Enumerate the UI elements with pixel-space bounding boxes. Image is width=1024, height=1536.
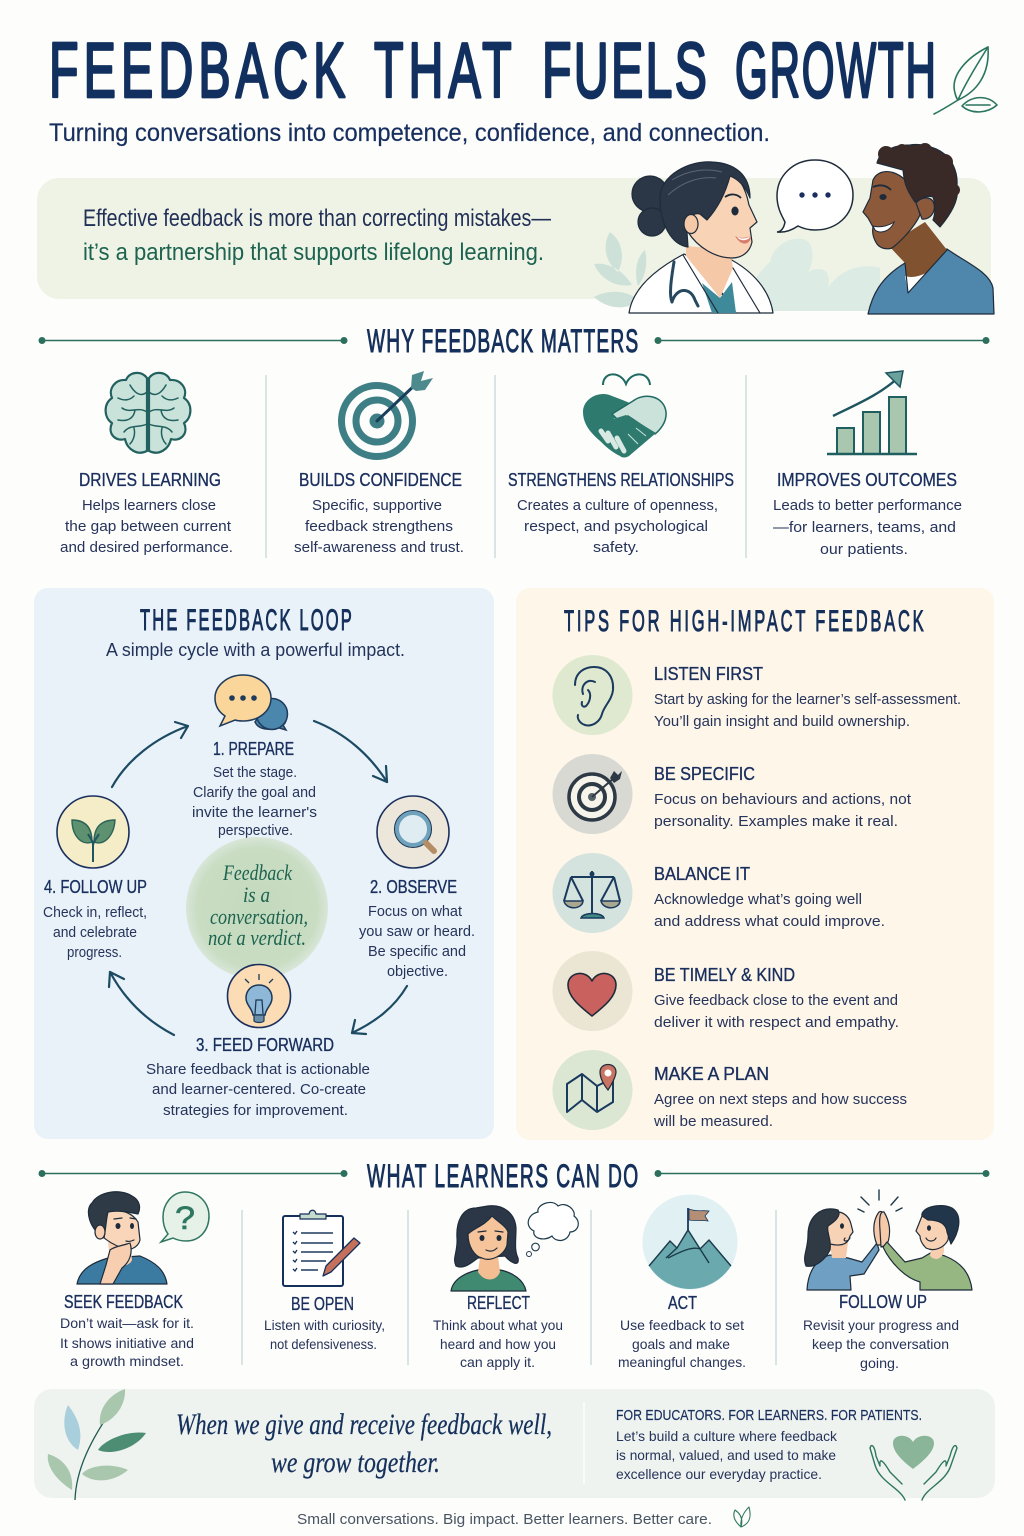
text: perspective. [218,822,293,839]
tip: be timely and kind [552,951,899,1031]
text [654,992,899,1031]
subheading: A simple cycle with a powerful impact. [106,639,405,660]
heading: IMPROVES OUTCOMES [777,470,957,490]
text: It shows initiative and [60,1335,194,1351]
text: intro statement [83,205,551,266]
tip: balance it [552,853,885,933]
text [264,1317,385,1352]
arrow: observe to feed forward [352,986,407,1034]
heading: 3. FEED FORWARD [196,1035,334,1055]
text: intro statement: it’s a partnership that supports lifelong learning. [83,239,544,266]
icon: balance scale [552,853,632,933]
text: a growth mindset. [70,1353,184,1369]
icon: chat bubbles [215,675,288,730]
action: seek feedback [60,1192,209,1369]
text: Clarify the goal and [193,784,316,801]
text [192,764,317,839]
closing quote: we grow together. [271,1446,440,1479]
text [653,1091,907,1130]
icon: magnifying glass [377,796,449,868]
text: the gap between current [65,518,232,535]
text: heard and how you [440,1336,556,1352]
icon: question bubble: ? [175,1200,195,1236]
text: Focus on what [368,903,463,920]
text: Give feedback close to the event and [654,992,898,1009]
call to action [616,1407,922,1482]
text: will be measured. [653,1113,773,1130]
title: FUELS [542,26,707,114]
text: can apply it. [460,1354,535,1370]
arrow: feed forward to follow up [109,972,174,1035]
call to action: is normal, valued, and used to make [616,1447,836,1463]
text [803,1317,959,1371]
action: reflect [433,1202,578,1370]
text [60,497,233,556]
icon: mountain with flag [642,1194,738,1290]
section heading: what learners can do [38,1158,990,1194]
text: Think about what you [433,1317,563,1333]
text [517,497,718,556]
illustration: doctor [629,162,773,313]
text: Revisit your progress and [803,1317,959,1333]
tip: be specific [552,754,912,834]
step 4: follow up [43,796,147,961]
column: improves outcomes [773,371,962,558]
section heading: why feedback matters: WHY FEEDBACK MATTERS [367,323,638,359]
text: and learner-centered. Co-create [152,1081,366,1098]
step 3: feed forward [146,964,370,1119]
panel: closing banner [34,1389,995,1500]
text: Set the stage. [213,764,297,781]
text: and address what could improve. [654,913,885,930]
text: you saw or heard. [359,923,475,940]
heading: BALANCE IT [654,864,750,884]
column: drives learning [60,373,233,556]
icon: title leaf sprig [934,47,997,114]
text: meaningful changes. [618,1354,746,1370]
text: Check in, reflect, [43,904,147,921]
heading: MAKE A PLAN [654,1064,769,1084]
center message: Feedback [222,860,293,885]
text: safety. [593,539,639,556]
icon: sprout [57,796,129,868]
panel: tips for high-impact feedback [516,588,994,1140]
icon: ear [552,655,632,735]
heading: 1. PREPARE [213,739,294,759]
heading: ACT [668,1293,697,1313]
footer tagline: Small conversations. Big impact. Better learners. Better care. [297,1511,712,1528]
illustration: background foliage [594,232,880,315]
heading: BE OPEN [291,1294,354,1314]
text: intro statement: Effective feedback is more than correcting mistakes— [83,205,551,232]
panel: learner actions [60,1190,972,1371]
text: progress. [67,944,122,961]
text: Use feedback to set [620,1317,744,1333]
heading: STRENGTHENS RELATIONSHIPS [508,470,734,490]
icon: thought cloud [526,1202,578,1256]
text: objective. [387,963,448,980]
subtitle: Turning conversations into competence, confidence, and connection. [49,119,770,147]
arrow: follow up to prepare [112,722,188,787]
text: respect, and psychological [524,518,708,535]
text [618,1317,746,1370]
text: Acknowledge what’s going well [654,891,862,908]
icon: target with arrow [342,371,433,456]
icon: rising bar chart [827,371,917,454]
icon: brain [106,373,190,453]
panel: why feedback matters columns [60,371,962,558]
text: goals and make [632,1336,730,1352]
section heading: why feedback matters [38,323,990,359]
text: and celebrate [53,924,137,941]
text: Specific, supportive [312,497,442,514]
text: Leads to better performance [773,497,962,514]
call to action: excellence our everyday practice. [616,1466,822,1482]
text [359,903,475,980]
icon: target [552,754,632,834]
text: deliver it with respect and empathy. [654,1014,899,1031]
text: Agree on next steps and how success [654,1091,907,1108]
illustration: thinking learner [77,1192,167,1284]
text: Start by asking for the learner’s self-assessment. [654,691,961,708]
text: Listen with curiosity, [264,1317,385,1333]
text: going. [860,1355,899,1371]
action: follow up [803,1190,972,1371]
center message: is a [243,882,270,907]
title: FEEDBACK [49,26,345,114]
illustration: high five [805,1190,972,1290]
action: act [618,1194,746,1370]
center message: conversation, [210,904,308,929]
closing quote: When we give and receive feedback well, [176,1408,552,1441]
text: You’ll gain insight and build ownership. [654,713,910,730]
tip: listen first [552,655,961,735]
step 1: prepare [192,675,317,839]
panel: the feedback loop [34,588,494,1139]
icon: heart [552,951,632,1031]
heading: THE FEEDBACK LOOP [140,604,352,637]
text: our patients. [820,541,908,558]
text: self-awareness and trust. [294,539,464,556]
illustration: learner in scrubs [863,143,994,314]
heading: REFLECT [467,1293,530,1313]
icon: hands holding heart [870,1436,957,1500]
text [773,497,962,558]
heading: FOLLOW UP [839,1292,927,1312]
text [43,904,147,961]
text: invite the learner's [192,804,317,821]
column: builds confidence [294,371,464,556]
text: feedback strengthens [305,518,453,535]
heading: BUILDS CONFIDENCE [299,470,462,490]
heading: BE TIMELY & KIND [654,965,795,985]
text [654,791,912,830]
text: strategies for improvement. [163,1102,348,1119]
step 2: observe [359,796,475,980]
title: GROWTH [735,27,936,114]
heading: TIPS FOR HIGH-IMPACT FEEDBACK [564,605,924,638]
center message: not a verdict. [208,925,306,950]
text: Don’t wait—ask for it. [60,1315,194,1331]
heading: 2. OBSERVE [370,877,457,897]
text: Be specific and [368,943,466,960]
icon: light bulb [228,964,290,1028]
heading: LISTEN FIRST [654,664,763,684]
call to action: FOR EDUCATORS. FOR LEARNERS. FOR PATIENTS. [616,1407,922,1424]
text [60,1315,194,1369]
center message [186,837,328,979]
illustration: empty speech bubble [777,160,853,232]
text: Creates a culture of openness, [517,497,718,514]
text: Share feedback that is actionable [146,1061,370,1078]
column: strengthens relationships [508,374,734,556]
text [294,497,464,556]
text [654,891,885,930]
title: THAT [374,26,512,114]
text: Helps learners close [82,497,216,514]
section heading: what learners can do: WHAT LEARNERS CAN DO [367,1158,638,1194]
text: not defensiveness. [270,1336,377,1352]
closing quote [176,1408,552,1479]
heading: DRIVES LEARNING [79,470,221,490]
icon: clipboard and pencil [283,1210,360,1286]
text: Focus on behaviours and actions, not [654,791,912,808]
heading: BE SPECIFIC [654,764,755,784]
action: be open [264,1210,385,1352]
icon: small leaf [734,1507,750,1527]
text [433,1317,563,1370]
text: and desired performance. [60,539,233,556]
illustration: reflective learner [451,1206,526,1291]
icon: question bubble [161,1192,209,1242]
call to action: Let’s build a culture where feedback [616,1428,838,1444]
illustration: leafy branch [48,1389,146,1500]
tip: make a plan [552,1050,907,1130]
icon: handshake heart [583,374,666,458]
text [654,691,961,730]
text [146,1061,370,1119]
heading: SEEK FEEDBACK [64,1292,183,1312]
heading: 4. FOLLOW UP [44,877,147,897]
text: —for learners, teams, and [773,519,956,536]
title [49,26,936,114]
text: personality. Examples make it real. [654,813,898,830]
panel: intro banner [37,143,994,315]
arrow: prepare to observe [314,721,387,782]
icon: map with pin [552,1050,632,1130]
text: keep the conversation [812,1336,949,1352]
